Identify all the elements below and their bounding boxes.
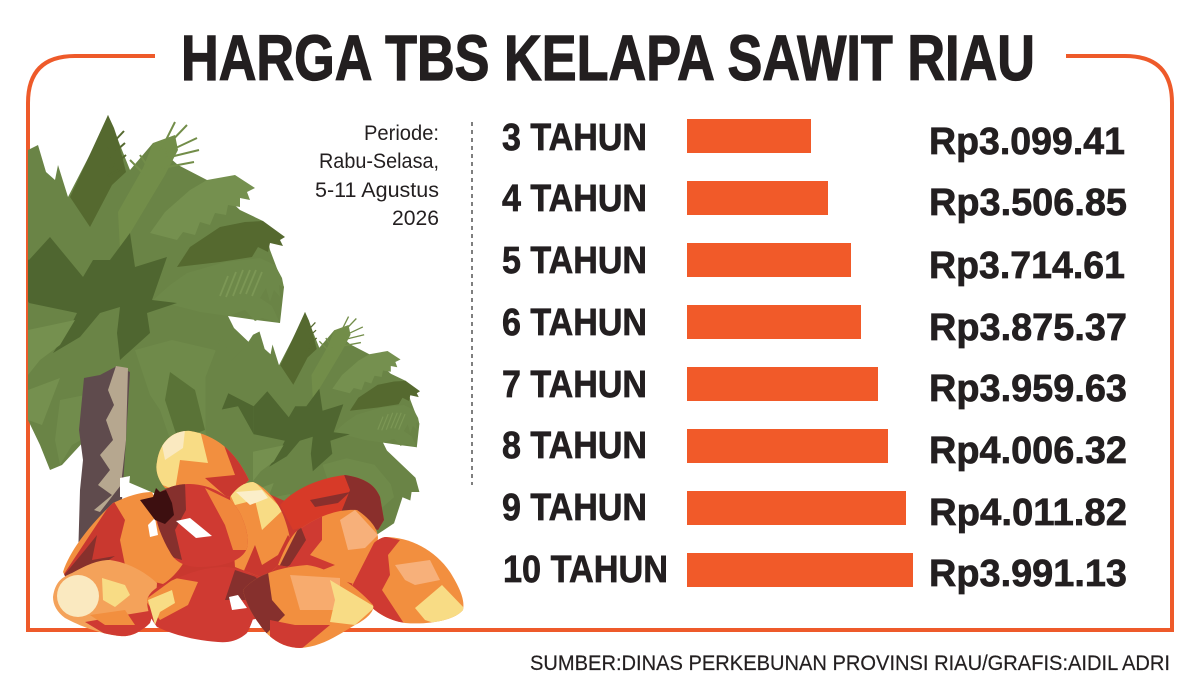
row: 9 years [502, 487, 1127, 534]
period note: Rabu-Selasa, [319, 149, 439, 173]
row: 3 years [502, 117, 1125, 163]
row: 6 years [502, 302, 1127, 349]
row: 3 years: Rp3.099.41 [929, 121, 1125, 163]
row: 10 years: Rp3.991.13 [929, 553, 1127, 595]
row: 8 years [502, 425, 1127, 472]
fruit: far right [352, 537, 464, 624]
fruit: centre red [153, 484, 248, 564]
fruit: left large [63, 492, 183, 584]
row: 5 years: Rp3.714.61 [929, 245, 1125, 287]
row: 8 years: Rp4.006.32 [929, 430, 1127, 472]
row: 5 years: 5 TAHUN [502, 240, 647, 282]
row: 6 years: Rp3.875.37 [929, 307, 1127, 349]
fruit: centre yellow [230, 482, 290, 577]
row: 4 years [502, 178, 1127, 224]
row: 7 years: 7 TAHUN [502, 364, 647, 406]
palm tree small [206, 312, 420, 562]
gap between palm fronds [120, 476, 130, 497]
fruit: back right [280, 475, 384, 530]
period note: 2026 [392, 206, 439, 230]
fruit: bottom right [243, 565, 374, 648]
row: 8 years: 8 TAHUN [502, 425, 647, 467]
fruit: right middle [278, 510, 378, 584]
period note: 5-11 Agustus [315, 178, 439, 202]
oil palm fruit cluster [50, 425, 470, 655]
chart: price by palm age [502, 117, 1127, 595]
row: 10 years [503, 549, 1127, 595]
row: 7 years [502, 364, 1127, 410]
row: 4 years: 4 TAHUN [502, 178, 647, 220]
title: HARGA TBS KELAPA SAWIT RIAU [181, 22, 1035, 94]
fruit stem [140, 488, 174, 524]
row: 5 years [502, 240, 1125, 287]
source line: SUMBER:DINAS PERKEBUNAN PROVINSI RIAU/GRAFIS:AIDIL ADRI [530, 652, 1170, 675]
period note: Periode: [364, 121, 439, 145]
fruit: back top [156, 430, 249, 497]
row: 3 years: 3 TAHUN [502, 117, 647, 159]
fruit: bottom middle [147, 570, 257, 642]
row: 4 years: Rp3.506.85 [929, 182, 1127, 224]
palm tree large [28, 115, 285, 494]
fruit: bottom left [53, 560, 157, 636]
row: 6 years: 6 TAHUN [502, 302, 647, 344]
period note [315, 121, 439, 230]
row: 9 years: 9 TAHUN [502, 487, 647, 529]
row: 10 years: 10 TAHUN [503, 549, 668, 591]
illustration: palm trees and fruit [0, 115, 470, 655]
row: 9 years: Rp4.011.82 [929, 492, 1127, 534]
row: 7 years: Rp3.959.63 [929, 368, 1127, 410]
palm trunk [78, 366, 130, 560]
